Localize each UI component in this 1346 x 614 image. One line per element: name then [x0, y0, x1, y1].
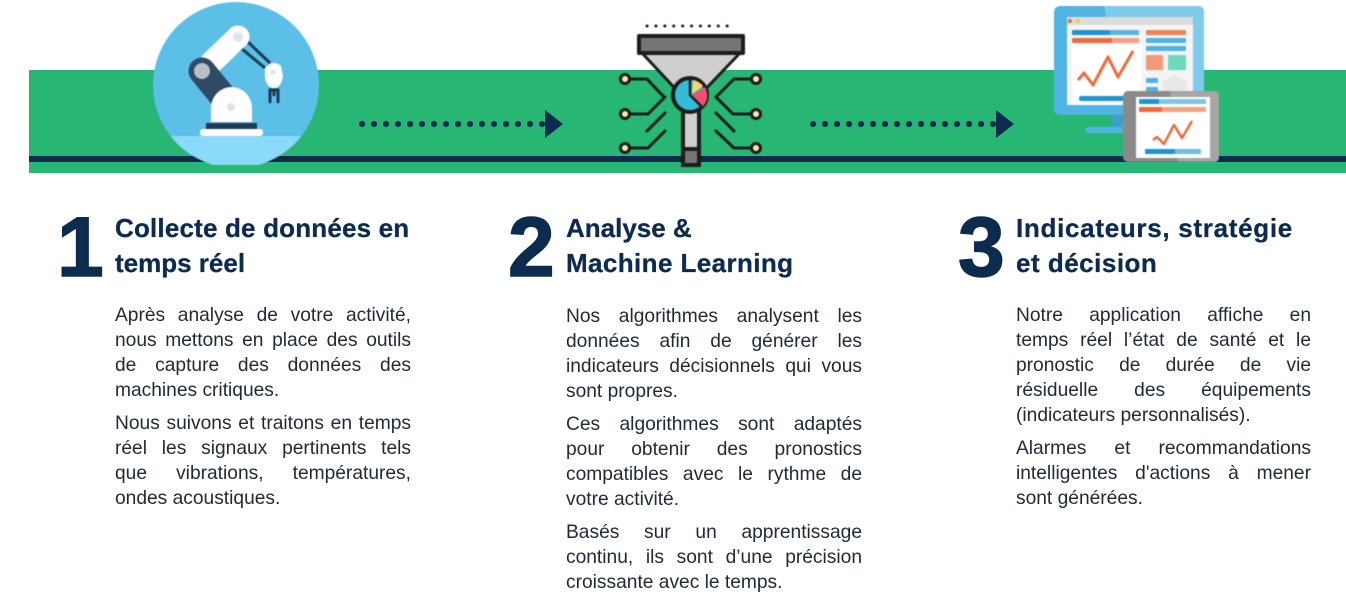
- number 3: 3: [958, 200, 1005, 294]
- text block 2: votre activité.: [566, 489, 679, 510]
- heading 2: Analyse &: [566, 213, 692, 243]
- icon: funnel: [620, 26, 760, 165]
- icon: monitor and tablet: [1054, 6, 1219, 162]
- text block 2: données afin de générer les: [566, 331, 862, 352]
- text block 2: pour obtenir des pronostics: [566, 439, 862, 460]
- text block 3: pronostic de durée de vie: [1016, 355, 1311, 376]
- text block 3: résiduelle des équipements: [1016, 380, 1311, 401]
- text block 2: Ces algorithmes sont adaptés: [566, 414, 862, 435]
- text block 3: intelligentes d'actions à mener: [1016, 463, 1311, 484]
- text block 2: croissante avec le temps.: [566, 572, 782, 593]
- text block 2: Basés sur un apprentissage: [566, 522, 862, 543]
- text block 2: sont propres.: [566, 381, 678, 402]
- green band: [29, 70, 1346, 173]
- text block 1: de capture des données des: [115, 355, 411, 376]
- text block 1: Après analyse de votre activité,: [115, 305, 411, 326]
- heading 2: Machine Learning: [566, 248, 793, 278]
- arrow: step 1 to 2: [362, 110, 563, 138]
- icon: robot arm: [150, 2, 322, 168]
- text block 2: compatibles avec le rythme de: [566, 464, 862, 485]
- text block 1: machines critiques.: [115, 380, 279, 401]
- heading 1: temps réel: [115, 248, 245, 278]
- text block 3: [1016, 305, 1311, 509]
- heading 1: [115, 213, 409, 278]
- text block 1: Nous suivons et traitons en temps: [115, 413, 411, 434]
- heading 3: Indicateurs, stratégie: [1016, 213, 1293, 243]
- text block 1: nous mettons en place des outils: [115, 330, 411, 351]
- number 1: 1: [57, 200, 104, 294]
- text block 2: continu, ils sont d’une précision: [566, 547, 862, 568]
- arrow: step 2 to 3: [813, 110, 1014, 138]
- text block 2: Nos algorithmes analysent les: [566, 306, 862, 327]
- heading 3: et décision: [1016, 248, 1157, 278]
- text block 1: que vibrations, températures,: [115, 463, 411, 484]
- text block 1: ondes acoustiques.: [115, 488, 280, 509]
- number 2: 2: [508, 200, 555, 294]
- text block 2: indicateurs décisionnels qui vous: [566, 356, 862, 377]
- text block 2: [566, 306, 862, 593]
- text block 3: Alarmes et recommandations: [1016, 438, 1311, 459]
- heading 2: [566, 213, 793, 278]
- text block 3: temps réel l’état de santé et le: [1016, 330, 1311, 351]
- heading 3: [1016, 213, 1293, 278]
- text block 3: sont générées.: [1016, 488, 1143, 509]
- navy line: [29, 156, 1346, 162]
- heading 1: Collecte de données en: [115, 213, 409, 243]
- text block 3: (indicateurs personnalisés).: [1016, 405, 1251, 426]
- text block 3: Notre application affiche en: [1016, 305, 1311, 326]
- text block 1: réel les signaux pertinents tels: [115, 438, 411, 459]
- text block 1: [115, 305, 411, 509]
